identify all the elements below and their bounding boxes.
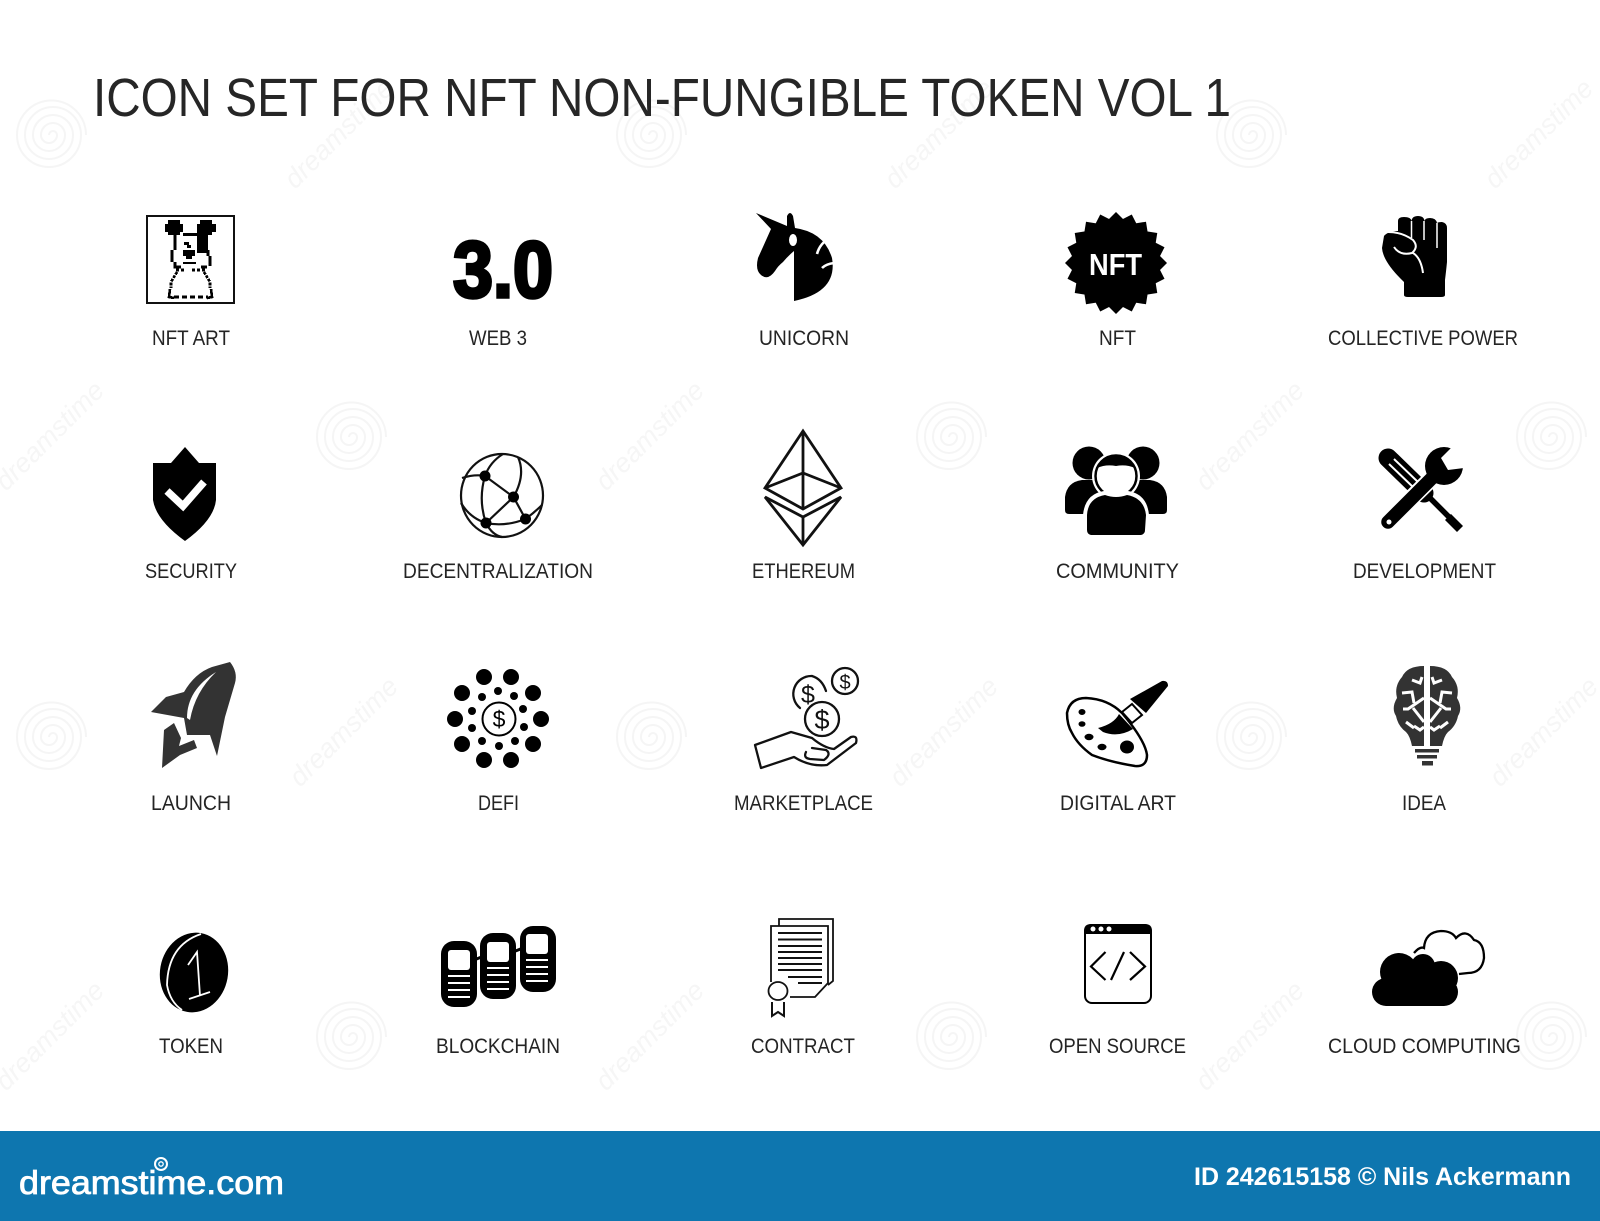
icon: group of people [1065, 446, 1167, 535]
label: TOKEN [159, 1035, 223, 1058]
panel: marketplace [734, 668, 873, 815]
label: COLLECTIVE POWER [1328, 327, 1518, 350]
icon: 3.0: 3.0 [453, 225, 553, 314]
label: OPEN SOURCE [1049, 1035, 1186, 1058]
text: dreamstime [1478, 73, 1599, 194]
text: dreamstime [589, 375, 710, 496]
icon: hand with coins: $ [801, 681, 815, 709]
icon: two clouds [1372, 931, 1484, 1006]
label: BLOCKCHAIN [436, 1035, 560, 1058]
icon: document with seal [768, 919, 833, 1016]
icon: brain light bulb [1394, 666, 1460, 766]
icon: shield with check [153, 447, 216, 541]
label: DIGITAL ART [1060, 792, 1176, 815]
panel: open source [1049, 924, 1186, 1058]
panel: collective power [1328, 216, 1518, 350]
icon: unicorn head [756, 213, 834, 301]
icon: wrench and screwdriver [1386, 446, 1475, 532]
label: ETHEREUM [752, 560, 855, 583]
panel: NFT art [147, 216, 234, 350]
icon: hand with coins: $ [814, 705, 830, 735]
label: WEB 3 [469, 327, 527, 350]
icon: linked blocks [441, 926, 556, 1007]
icon: palette and brush [1067, 681, 1168, 766]
panel: web 3 [453, 225, 553, 350]
icon: pixel dog in frame [147, 216, 234, 303]
text: dreamstime [878, 73, 999, 194]
icon: hand with coins: $ [839, 672, 851, 694]
panel: security [145, 447, 237, 583]
panel: idea [1394, 666, 1460, 815]
icon: raised fist [1382, 216, 1447, 297]
label: CLOUD COMPUTING [1328, 1035, 1521, 1058]
panel: DeFi [447, 669, 549, 815]
text: dreamstime [589, 975, 710, 1096]
text: dreamstime [1189, 975, 1310, 1096]
panel: contract [751, 919, 855, 1058]
icon: coin [154, 927, 234, 1018]
panel: launch [151, 662, 236, 815]
panel: development [1353, 446, 1496, 583]
icon: NFT starburst: NFT [1089, 247, 1142, 282]
icon: ethereum diamond [765, 431, 841, 545]
panel: blockchain [436, 926, 560, 1058]
label: MARKETPLACE [734, 792, 873, 815]
panel: ethereum [752, 431, 855, 583]
panel: NFT badge [1063, 210, 1169, 350]
label: SECURITY [145, 560, 237, 583]
label: IDEA [1402, 792, 1446, 815]
label: DEFI [478, 792, 519, 815]
icon: rocket [151, 662, 236, 768]
panel: community [1056, 446, 1179, 583]
label: DECENTRALIZATION [403, 560, 593, 583]
text: dreamstime [883, 671, 1004, 792]
panel: cloud computing [1328, 931, 1521, 1058]
text: dreamstime [283, 671, 404, 792]
panel: token [154, 927, 234, 1058]
label: NFT ART [152, 327, 230, 350]
icon: network globe [461, 454, 543, 537]
title: ICON SET FOR NFT NON-FUNGIBLE TOKEN VOL 1 [93, 68, 1231, 128]
icon: dots ring around dollar [447, 669, 549, 768]
panel: digital art [1060, 681, 1176, 815]
icon: code window [1084, 924, 1152, 1003]
label: COMMUNITY [1056, 560, 1179, 583]
footer bar [0, 1131, 1600, 1221]
label: CONTRACT [751, 1035, 855, 1058]
label: LAUNCH [151, 792, 231, 815]
label: UNICORN [759, 327, 849, 350]
panel: decentralization [403, 454, 593, 583]
icon: dots ring around dollar: $ [493, 706, 506, 732]
text: dreamstime [1189, 375, 1310, 496]
icon: hand with coins [755, 668, 858, 768]
label: DEVELOPMENT [1353, 560, 1496, 583]
image id and credit: ID 242615158 © Nils Ackermann [1194, 1163, 1571, 1191]
label: NFT [1099, 327, 1136, 350]
panel: unicorn [756, 213, 849, 350]
text: dreamstime [278, 73, 399, 194]
dreamstime logo: dreamstime.com [19, 1164, 284, 1201]
